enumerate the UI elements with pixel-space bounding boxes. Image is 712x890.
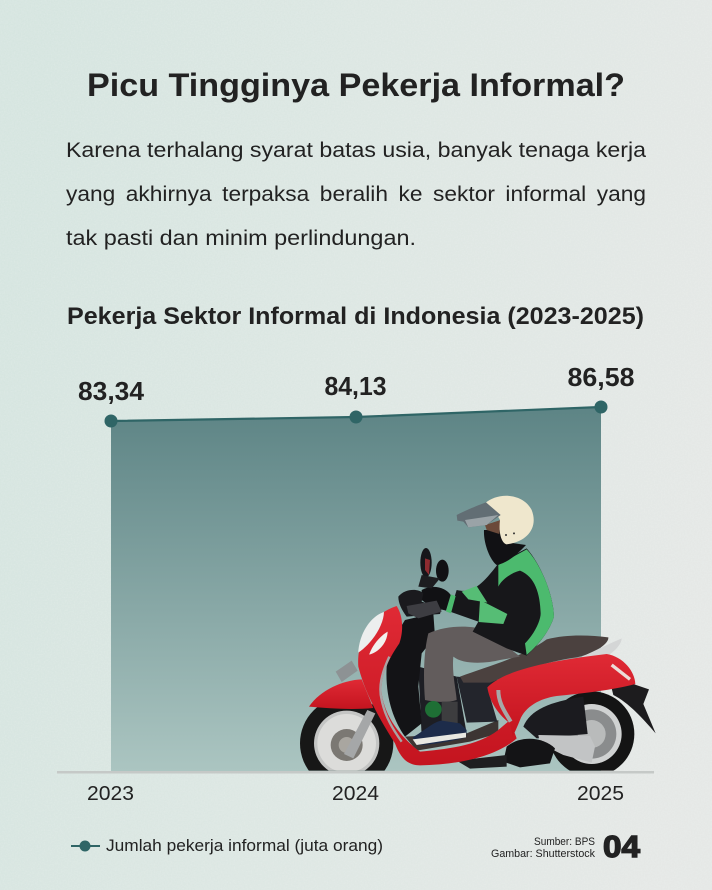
seat handle — [582, 638, 622, 657]
cuff — [446, 594, 456, 613]
intro paragraph — [66, 138, 646, 250]
silver trim — [380, 657, 402, 742]
rear body — [487, 654, 635, 737]
year 2024: 2024 — [332, 782, 379, 805]
value 2023: 83,34 — [78, 378, 145, 406]
legend — [71, 837, 383, 855]
inner panel dark — [457, 677, 498, 723]
legend label: Jumlah pekerja informal (juta orang) — [106, 837, 383, 855]
chart area fill — [111, 407, 601, 771]
neck mask — [484, 530, 526, 565]
rear fender — [612, 684, 656, 733]
helmet — [485, 496, 534, 544]
data line — [111, 407, 601, 421]
dark panel behind leg — [418, 667, 467, 737]
year 2025: 2025 — [577, 782, 624, 805]
intro paragraph: Karena terhalang syarat batas usia, banyak tenaga kerja — [66, 138, 646, 162]
legend line marker — [71, 840, 100, 852]
sock — [442, 702, 458, 725]
year 2023: 2023 — [87, 782, 134, 805]
jacket — [450, 548, 554, 656]
front wheel — [300, 704, 394, 771]
data point 2025 — [594, 400, 608, 414]
shoe — [413, 721, 467, 745]
license plate — [336, 661, 358, 682]
data point 2024 — [350, 410, 362, 424]
body trim — [498, 690, 511, 722]
headlight — [358, 612, 384, 653]
intro paragraph: yang akhirnya terpaksa beralih ke sektor informal yang — [66, 182, 646, 206]
fork — [344, 710, 375, 758]
floor board dark — [405, 720, 498, 751]
source credits: Sumber: BPS — [534, 836, 595, 848]
data point 2023 — [104, 414, 118, 428]
inner shield dark — [386, 613, 435, 737]
source credits — [491, 836, 595, 860]
mirrors — [420, 548, 432, 577]
rear wheel — [554, 692, 634, 771]
face — [485, 520, 501, 534]
red front shield — [358, 606, 517, 765]
value 2024: 84,13 — [324, 373, 386, 401]
area line chart — [57, 364, 654, 805]
seat — [460, 635, 608, 683]
green object — [425, 701, 442, 718]
rear swing and engine — [523, 697, 588, 738]
chart title: Pekerja Sektor Informal di Indonesia (2023-2025) — [67, 303, 644, 330]
front fender — [309, 679, 373, 709]
jacket green side — [498, 549, 554, 655]
source credits: Gambar: Shutterstock — [491, 848, 595, 860]
page number: 04 — [603, 829, 641, 864]
visor — [457, 502, 501, 527]
value 2025: 86,58 — [568, 364, 634, 392]
intro paragraph: tak pasti dan minim perlindungan. — [66, 226, 416, 250]
glove hands — [422, 587, 451, 611]
title: Picu Tingginya Pekerja Informal? — [87, 67, 625, 103]
jacket green sleeve — [479, 600, 507, 624]
baseline axis — [57, 771, 654, 774]
illustration: scooter rider — [300, 496, 656, 790]
trousers — [424, 627, 520, 702]
